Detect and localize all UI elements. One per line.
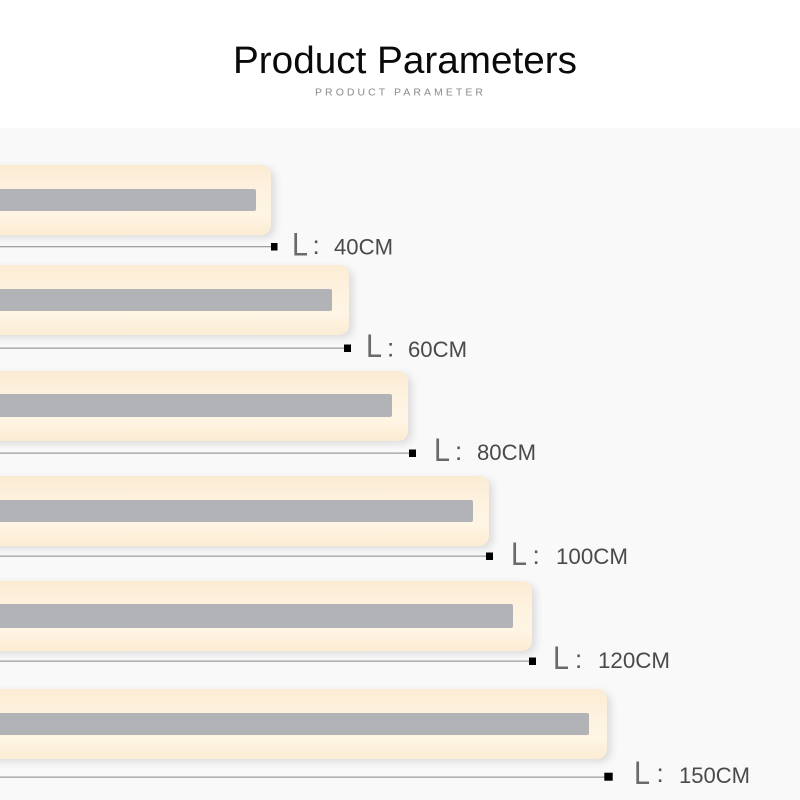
lamp 60CM — [0, 265, 353, 338]
lamp 80CM — [0, 371, 412, 444]
label 40CM: L — [292, 226, 308, 262]
title: Product Parameters — [233, 40, 577, 82]
label 100CM — [511, 536, 628, 572]
lamp 40CM — [0, 165, 275, 238]
label 120CM: L — [553, 640, 569, 676]
header background — [0, 0, 800, 128]
subtitle: PRODUCT PARAMETER — [315, 86, 483, 98]
label 40CM: : — [312, 230, 320, 260]
label 80CM — [434, 432, 536, 468]
label 150CM: : — [656, 758, 664, 788]
label 80CM: 80CM — [477, 440, 536, 465]
lamp 100CM — [0, 476, 493, 549]
label 150CM: 150CM — [679, 763, 750, 788]
label 60CM — [366, 328, 467, 364]
label 80CM: : — [455, 436, 462, 466]
label 100CM: 100CM — [556, 544, 628, 569]
lamp 150CM — [0, 689, 611, 762]
label 80CM: L — [434, 432, 450, 468]
dimension line 40CM — [0, 243, 278, 250]
label 120CM — [553, 640, 670, 676]
label 60CM: 60CM — [408, 337, 467, 362]
label 60CM: L — [366, 328, 382, 364]
label 60CM: : — [387, 332, 394, 362]
dimension line 60CM — [0, 344, 351, 352]
label 150CM — [634, 755, 750, 791]
dimension line 80CM — [0, 450, 416, 457]
label 120CM: : — [575, 644, 582, 674]
label 150CM: L — [634, 755, 650, 791]
label 100CM: : — [532, 540, 540, 570]
label 40CM: 40CM — [334, 234, 393, 260]
dimension line 120CM — [0, 658, 536, 665]
dimension line 150CM — [0, 773, 613, 781]
lamp 120CM — [0, 581, 536, 654]
label 120CM: 120CM — [598, 648, 670, 673]
label 40CM — [292, 226, 393, 262]
label 100CM: L — [511, 536, 527, 572]
dimension line 100CM — [0, 552, 493, 560]
